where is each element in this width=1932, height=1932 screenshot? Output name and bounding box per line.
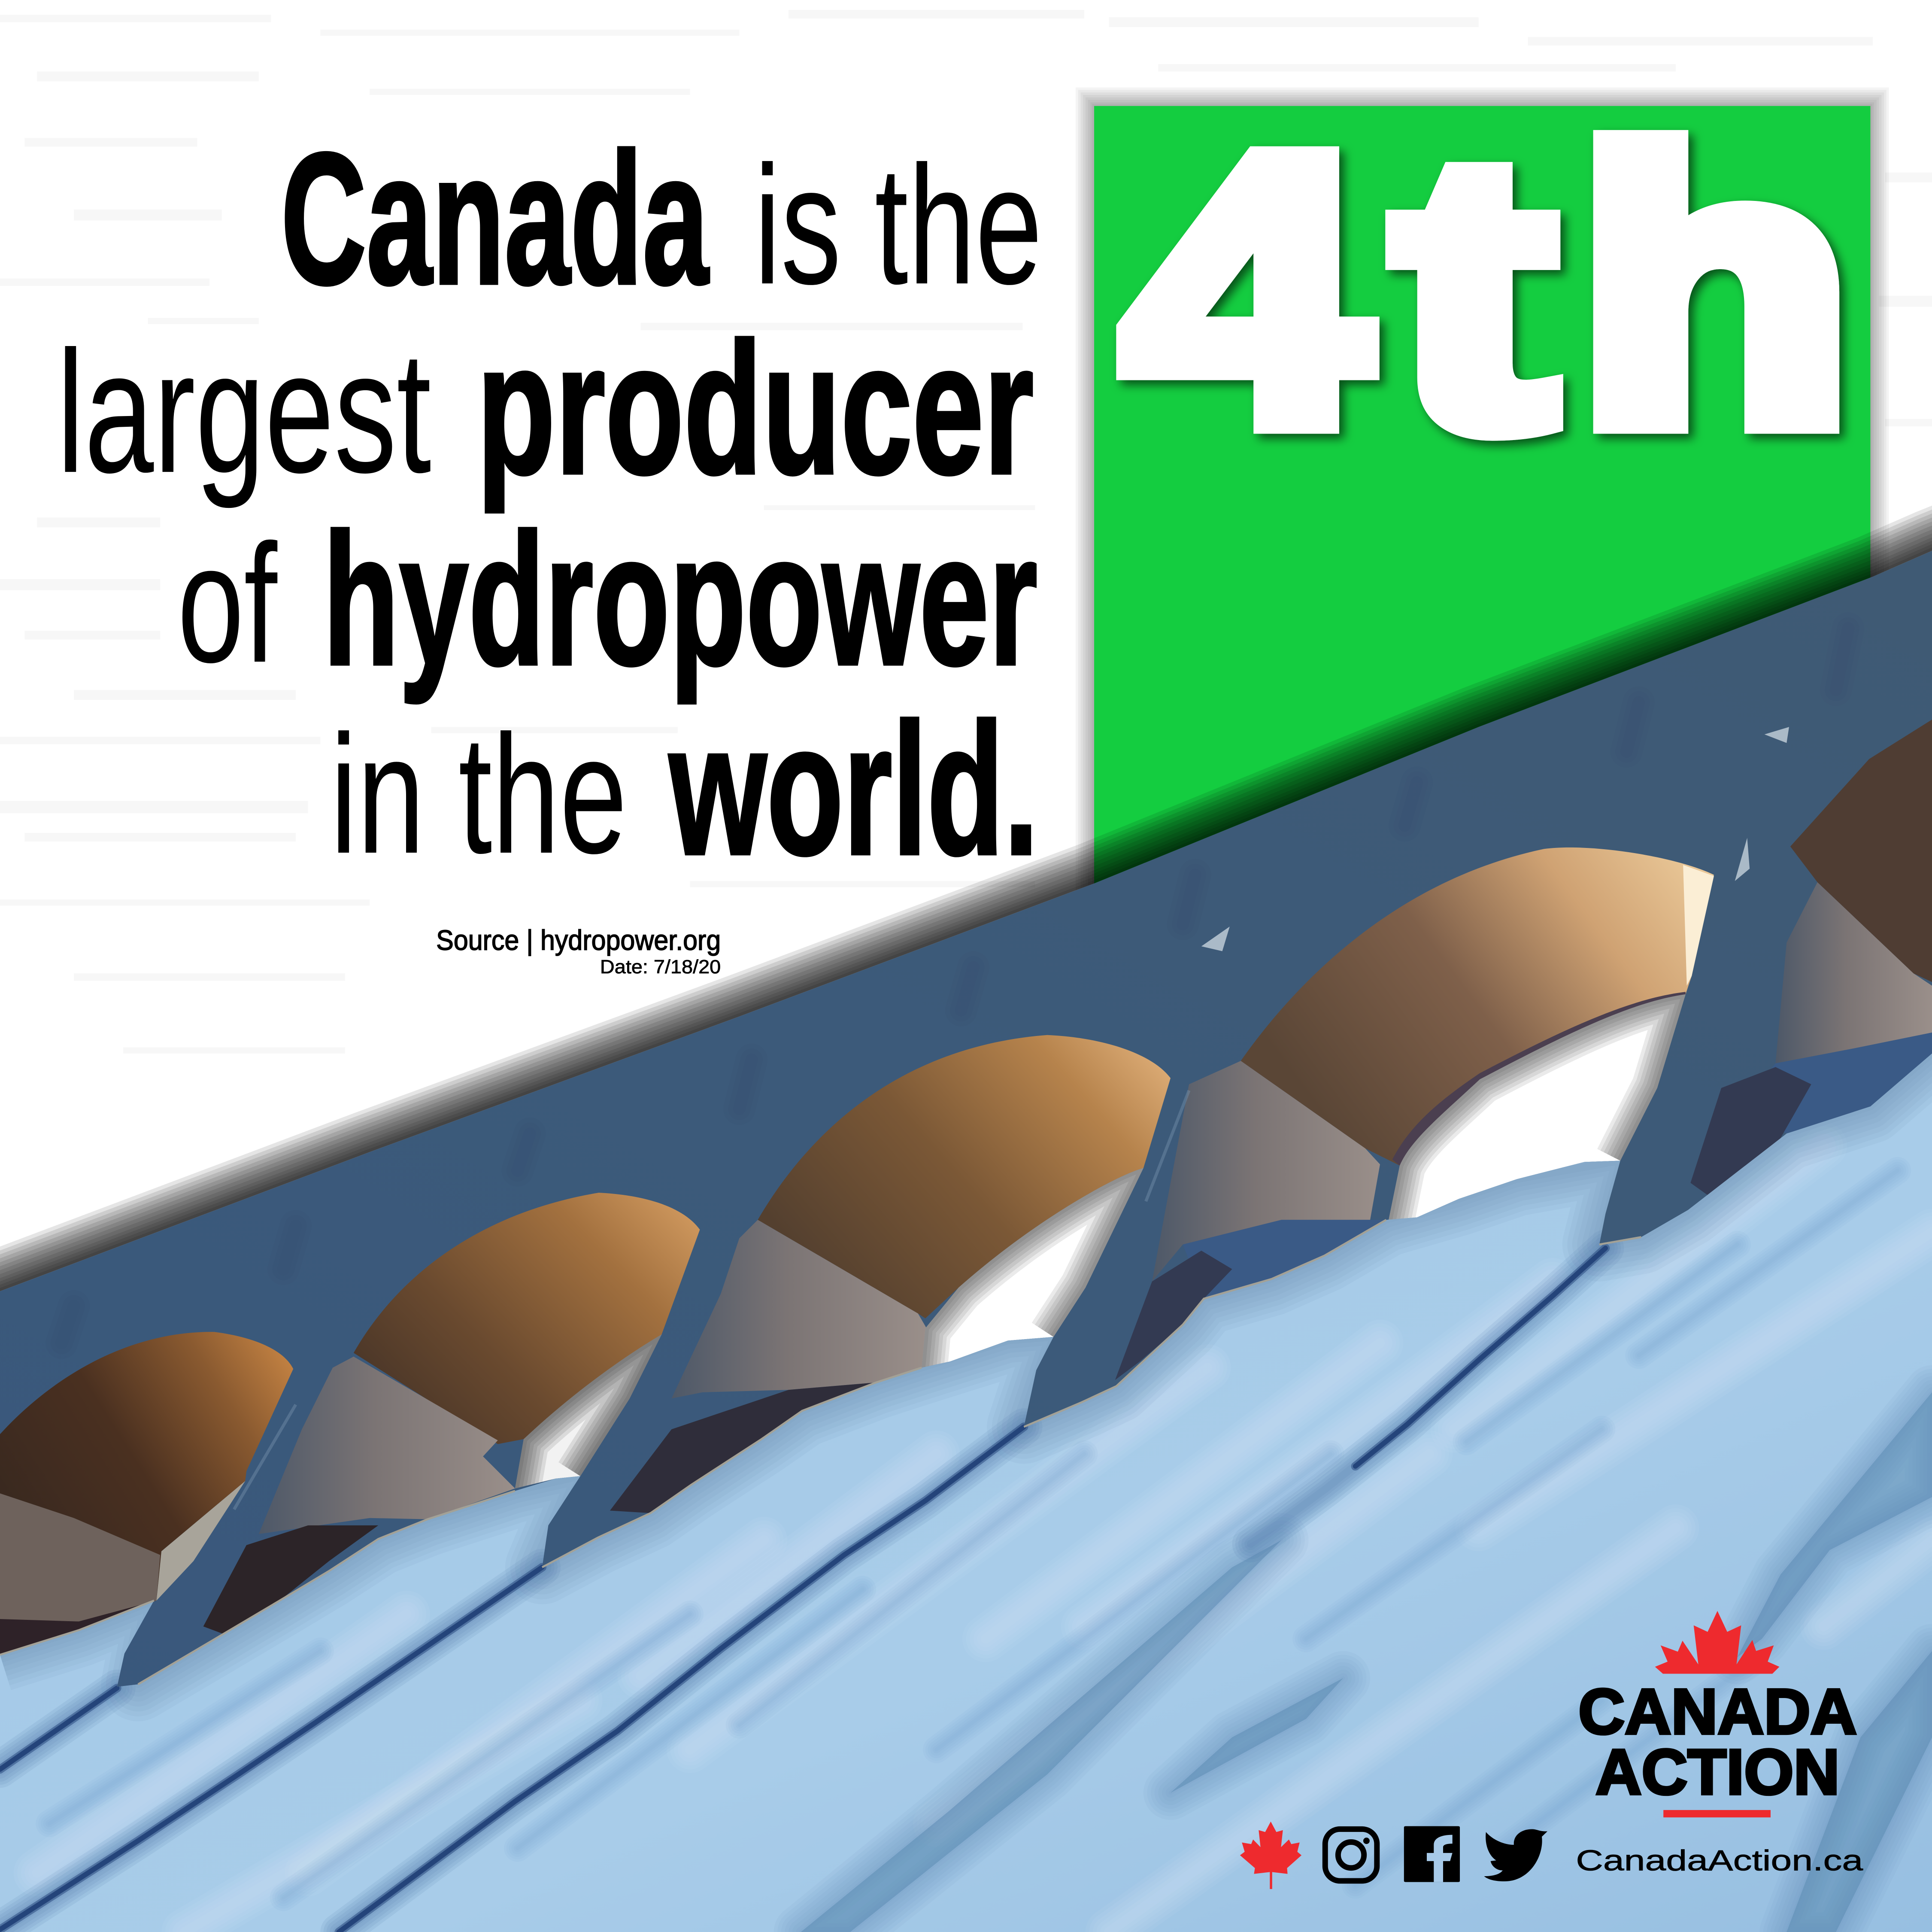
headline — [57, 114, 1042, 894]
light water streaks — [37, 1146, 1932, 1932]
line 3: of — [177, 509, 278, 698]
icon: instagram — [1325, 1829, 1377, 1881]
photo: concrete dam structure — [0, 551, 1932, 1725]
line 4: world. — [667, 685, 1039, 894]
dam surface mottling — [62, 629, 1848, 1343]
pier highlights — [234, 1091, 1189, 1510]
source note — [436, 924, 721, 978]
source note: Date: 7/18/20 — [600, 957, 721, 978]
big stat: 4th: 4 — [1124, 76, 1371, 502]
arch 3 — [610, 1035, 1171, 1513]
photo: rushing water — [0, 1035, 1932, 1932]
logo wordmark: CANADA — [1578, 1676, 1857, 1747]
logo wordmark — [1578, 1676, 1857, 1808]
dark channel lines — [0, 1248, 1605, 1932]
water edge rim — [0, 1220, 1641, 1684]
line 4: in the — [330, 700, 627, 889]
arch 1 — [0, 1332, 293, 1655]
line 2: largest — [57, 315, 432, 510]
panel: green stat box — [1094, 106, 1870, 919]
line 3 — [177, 495, 1037, 705]
line 2: producer — [477, 304, 1034, 514]
blue water shadows — [801, 1392, 1932, 1932]
line 4 — [330, 685, 1039, 894]
social row — [1240, 1822, 1863, 1889]
website: CanadaAction.ca — [1576, 1845, 1863, 1877]
big stat: 4th — [1124, 76, 1850, 507]
arch 2 — [203, 1193, 700, 1634]
icon: large maple leaf — [1655, 1611, 1779, 1674]
darker water streaks — [49, 1170, 1898, 1898]
red underline — [1663, 1810, 1771, 1817]
icon: twitter — [1484, 1829, 1547, 1881]
concrete flecks — [1201, 727, 1789, 951]
rim shade near the dam — [0, 1054, 1932, 1684]
arch 5 — [1690, 720, 1932, 1201]
big stat: 4th: t — [1395, 77, 1554, 507]
line 1: Canada — [281, 114, 709, 323]
big stat: 4th: h — [1580, 76, 1850, 499]
line 2 — [57, 304, 1034, 514]
dam body — [0, 551, 1932, 1725]
logo wordmark: ACTION — [1595, 1736, 1840, 1808]
icon: facebook — [1404, 1826, 1460, 1882]
logo: Canada Action — [1578, 1611, 1857, 1817]
line 1: is the — [754, 131, 1042, 319]
soft shading along channel lines — [0, 1248, 1605, 1932]
arch 4 — [1115, 848, 1714, 1380]
line 3: hydropower — [323, 495, 1037, 705]
source note: Source | hydropower.org — [436, 924, 721, 956]
shadow cast by the dam — [0, 525, 1932, 1318]
icon: small maple leaf — [1240, 1822, 1301, 1889]
